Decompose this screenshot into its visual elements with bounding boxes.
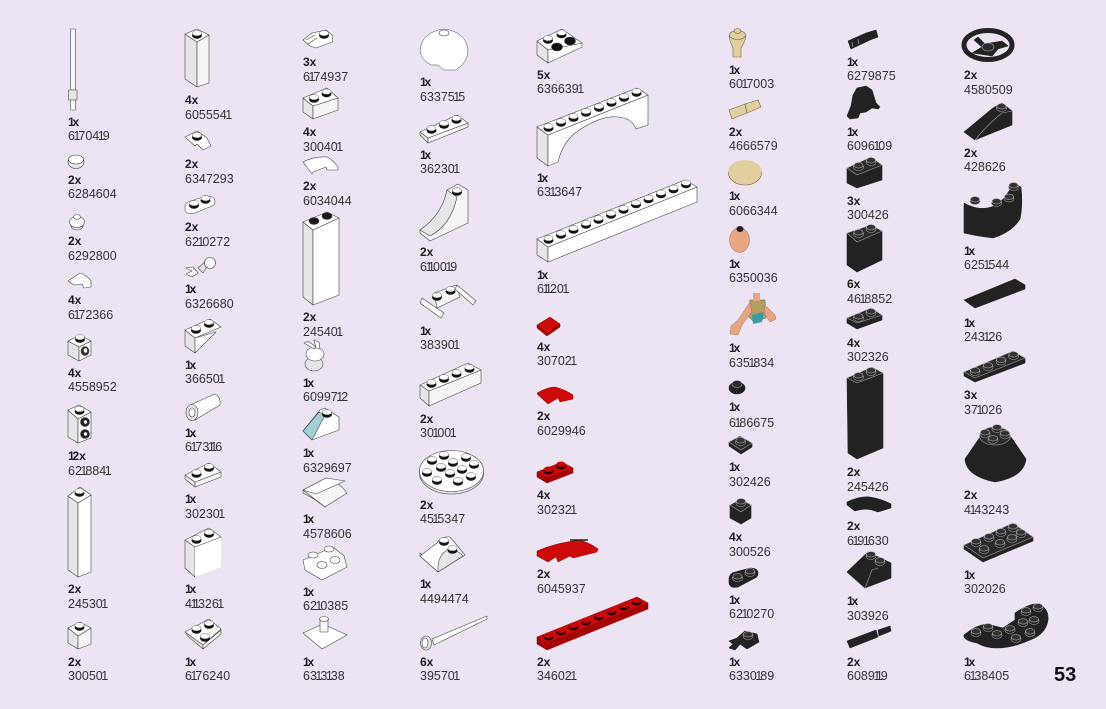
label: 6347293 — [185, 157, 234, 186]
icon: slope with black studs — [537, 29, 582, 63]
label: 300501: 300501 — [68, 669, 108, 683]
icon: black curved tile — [847, 497, 891, 512]
label: 300526: 4x — [729, 530, 743, 544]
label: 6284604 — [68, 173, 117, 201]
label: 243126 — [964, 316, 1002, 344]
icon: brick with side stud — [68, 334, 91, 361]
label: 6174937: 6174937 — [303, 70, 348, 84]
icon: 1x1 brick — [68, 622, 91, 649]
label: 6210385: 1x — [303, 585, 314, 599]
label: 6351834 — [729, 341, 774, 370]
label: 6284604: 6284604 — [68, 187, 117, 201]
label: 6089119 — [847, 655, 888, 683]
label: 6284604: 2x — [68, 173, 82, 187]
label: 4113261: 1x — [185, 582, 196, 596]
label: 302301: 302301 — [185, 507, 225, 521]
icon: red tile — [537, 317, 560, 336]
label: 6347293: 2x — [185, 157, 199, 171]
label: 4143243: 2x — [964, 488, 978, 502]
icon: tan cone — [729, 28, 746, 57]
label: 6366391 — [537, 68, 584, 96]
label: 6218841 — [68, 449, 112, 478]
icon: small clip parts — [186, 258, 216, 277]
icon: black handle — [848, 30, 878, 49]
icon: long antenna — [420, 616, 487, 650]
icon: oval plate — [185, 196, 215, 214]
label: 300501 — [68, 655, 108, 683]
label: 300526: 300526 — [729, 545, 771, 559]
label: 6096109 — [847, 125, 892, 153]
label: 6366391: 6366391 — [537, 82, 584, 96]
icon: tan round tile — [728, 160, 762, 185]
label: 300426: 300426 — [847, 208, 889, 222]
label: 6172366 — [68, 293, 113, 322]
label: 300401: 4x — [303, 125, 317, 139]
label: 300501: 2x — [68, 655, 82, 669]
label: 346021 — [537, 655, 577, 683]
label: 6096109: 1x — [847, 125, 858, 139]
label: 346021: 2x — [537, 655, 551, 669]
label: 307021 — [537, 340, 577, 368]
label: 6210270 — [729, 593, 774, 621]
label: 395701 — [420, 655, 460, 683]
label: 302321: 4x — [537, 488, 551, 502]
label: 4494474: 4494474 — [420, 592, 469, 606]
label: 245301: 245301 — [68, 597, 108, 611]
label: 6210272 — [185, 220, 230, 249]
label: 6045937: 2x — [537, 567, 551, 581]
icon: slope with transparent blue — [303, 408, 339, 440]
icon: black plate with clip — [729, 631, 759, 650]
label: 4558952: 4558952 — [68, 380, 117, 394]
label: 6326680 — [185, 282, 234, 311]
label: 6210270: 6210270 — [729, 607, 774, 621]
label: 4494474 — [420, 577, 469, 606]
label: 6313647 — [537, 171, 582, 199]
label: 302426: 1x — [729, 460, 740, 474]
label: 6351834: 1x — [729, 341, 740, 355]
icon: black half-round brick — [964, 182, 1022, 238]
icon: black 2x4 plate — [964, 523, 1033, 562]
label: 300526 — [729, 530, 771, 559]
label: 6176240 — [185, 655, 230, 683]
label: 6017003: 1x — [729, 63, 740, 77]
icon: curved quarter tile — [68, 273, 91, 288]
label: 6279875 — [847, 55, 896, 83]
label: 4578606 — [303, 512, 352, 541]
label: 6172366: 4x — [68, 293, 82, 307]
label: 6066344: 6066344 — [729, 204, 778, 218]
icon: red curved tile — [537, 387, 573, 404]
label: 383901: 383901 — [420, 338, 460, 352]
label: 6186675: 6186675 — [729, 416, 774, 430]
label: 6279875: 1x — [847, 55, 858, 69]
icon: red 1x2 plate — [537, 462, 573, 483]
label: 302326: 4x — [847, 336, 861, 350]
label: 245301 — [68, 582, 108, 611]
icon: black cone — [965, 424, 1026, 482]
icon: 1x4 brick — [420, 363, 481, 406]
label: 6350036 — [729, 257, 778, 285]
label: 6017003: 6017003 — [729, 77, 774, 91]
label: 6099712: 1x — [303, 376, 314, 390]
label: 4515347 — [420, 498, 465, 526]
icon: black 1x1 brick — [730, 498, 751, 524]
page number: 53 — [1054, 664, 1076, 686]
icon: minidoll torso — [730, 293, 776, 335]
label: 6138405: 1x — [964, 655, 975, 669]
label: 6045937: 6045937 — [537, 582, 586, 596]
label: 6313138: 6313138 — [303, 669, 345, 683]
label: 6173116: 1x — [185, 426, 196, 440]
label: 611201: 611201 — [537, 282, 569, 296]
label: 346021: 346021 — [537, 669, 577, 683]
label: 6337515: 6337515 — [420, 90, 465, 104]
label: 6029946: 2x — [537, 409, 551, 423]
label: 6313138: 1x — [303, 655, 314, 669]
label: 371026 — [964, 388, 1002, 417]
icon: round plate — [420, 450, 484, 494]
label: 6034044: 6034044 — [303, 194, 352, 208]
label: 6313647: 6313647 — [537, 185, 582, 199]
icon: tall 1x1 brick — [185, 29, 209, 87]
icon: 1x12 brick — [537, 180, 697, 262]
label: 245401: 2x — [303, 310, 317, 324]
label: 301001: 2x — [420, 412, 434, 426]
label: 302026: 302026 — [964, 582, 1006, 596]
label: 6292800: 2x — [68, 234, 82, 248]
label: 6110019: 2x — [420, 245, 434, 259]
icon: antenna — [68, 29, 77, 110]
icon: curved slope — [303, 478, 347, 507]
label: 6176240: 6176240 — [185, 669, 230, 683]
label: 6138405: 6138405 — [964, 669, 1009, 683]
label: 302426: 302426 — [729, 475, 771, 489]
icon: brick with two side studs — [68, 405, 91, 443]
icon: black long tile — [964, 279, 1025, 308]
label: 4618852: 6x — [847, 277, 861, 291]
label: 6055541: 4x — [185, 93, 199, 107]
icon: black tall brick — [847, 367, 883, 459]
label: 245401 — [303, 310, 343, 339]
icon: red curved plate — [537, 540, 598, 562]
label: 6191630: 6191630 — [847, 534, 889, 548]
label: 6337515 — [420, 75, 465, 104]
label: 4143243 — [964, 488, 1009, 517]
label: 4558952: 4x — [68, 366, 82, 380]
label: 6326680: 1x — [185, 282, 196, 296]
label: 6191630: 2x — [847, 519, 861, 533]
label: 6034044: 2x — [303, 179, 317, 193]
icon: round tile — [68, 155, 84, 168]
label: 307021: 307021 — [537, 354, 577, 368]
label: 6329697: 1x — [303, 446, 314, 460]
label: 6292800: 6292800 — [68, 249, 117, 263]
label: 6218841: 6218841 — [68, 464, 112, 478]
icon: white dome — [420, 29, 468, 70]
label: 395701: 6x — [420, 655, 434, 669]
label: 300426: 3x — [847, 194, 861, 208]
label: 6055541 — [185, 93, 232, 122]
label: 300401: 300401 — [303, 140, 343, 154]
label: 6066344: 1x — [729, 189, 740, 203]
label: 4113261 — [185, 582, 224, 611]
label: 4666579 — [729, 125, 778, 153]
label: 302301 — [185, 492, 225, 521]
label: 303926 — [847, 594, 889, 623]
icon: plate with bars — [420, 285, 476, 318]
label: 6186675 — [729, 400, 774, 430]
icon: round ball part — [70, 214, 84, 230]
label: 6351834: 6351834 — [729, 356, 774, 370]
label: 302026: 1x — [964, 568, 975, 582]
icon: black half-round plate — [964, 604, 1048, 648]
label: 6350036: 6350036 — [729, 271, 778, 285]
label: 362301: 1x — [420, 148, 431, 162]
icon: plate with clip — [185, 131, 211, 150]
label: 300401 — [303, 125, 343, 154]
label: 6292800 — [68, 234, 117, 263]
icon: jumper plate — [303, 616, 347, 649]
icon: black slope — [847, 552, 891, 588]
icon: black lightsaber hilt — [847, 626, 891, 648]
icon: 1x3 plate — [420, 115, 468, 143]
label: 366501: 366501 — [185, 372, 225, 386]
label: 6191630 — [847, 519, 889, 548]
label: 6110019 — [420, 245, 457, 274]
label: 362301 — [420, 148, 460, 176]
label: 6313138 — [303, 655, 345, 683]
label: 302301: 1x — [185, 492, 196, 506]
label: 4666579: 4666579 — [729, 139, 778, 153]
label: 4494474: 1x — [420, 577, 431, 591]
label: 366501 — [185, 358, 225, 386]
label: 6279875: 6279875 — [847, 69, 896, 83]
label: 245426: 245426 — [847, 480, 889, 494]
icon: cylinder pin — [186, 394, 220, 420]
label: 6170419: 6170419 — [68, 129, 110, 143]
label: 6251544: 6251544 — [964, 258, 1009, 272]
icon: tall brick — [68, 487, 91, 577]
label: 6138405 — [964, 655, 1009, 683]
label: 6366391: 5x — [537, 68, 551, 82]
icon: inverted slope — [185, 319, 221, 353]
icon: inverted double plate — [303, 546, 347, 580]
icon: black steering wheel — [964, 30, 1012, 60]
label: 6350036: 1x — [729, 257, 740, 271]
label: 6045937 — [537, 567, 586, 596]
icon: black curved slope — [964, 103, 1012, 140]
label: 6017003 — [729, 63, 774, 91]
label: 395701: 395701 — [420, 669, 460, 683]
label: 6172366: 6172366 — [68, 308, 113, 322]
icon: 1x2 plate — [185, 463, 221, 487]
label: 611201: 1x — [537, 268, 548, 282]
label: 6174937 — [303, 55, 348, 84]
label: 6251544: 1x — [964, 244, 975, 258]
label: 6099712: 6099712 — [303, 390, 348, 404]
label: 6110019: 6110019 — [420, 260, 457, 274]
icon: black 1x2 brick — [847, 157, 882, 188]
label: 4618852: 4618852 — [847, 292, 892, 306]
label: 245426 — [847, 465, 889, 494]
column 5 — [537, 29, 697, 683]
label: 6029946: 6029946 — [537, 424, 586, 438]
label: 428626: 2x — [964, 146, 978, 160]
label: 4143243: 4143243 — [964, 503, 1009, 517]
label: 371026: 3x — [964, 388, 978, 402]
column 7 — [847, 30, 896, 683]
label: 302026 — [964, 568, 1006, 596]
label: 6176240: 1x — [185, 655, 196, 669]
label: 6218841: 12x — [68, 449, 86, 463]
label: 6329697 — [303, 446, 352, 475]
column 1 — [68, 29, 117, 683]
label: 245401: 245401 — [303, 325, 343, 339]
icon: black 1x1 plate — [729, 436, 752, 454]
icon: plate with clips — [303, 30, 333, 48]
icon: black 1x4 plate — [964, 351, 1025, 382]
label: 383901: 1x — [420, 324, 431, 338]
label: 6326680: 6326680 — [185, 297, 234, 311]
label: 6251544 — [964, 244, 1009, 272]
label: 302426 — [729, 460, 771, 489]
icon: black oval plate — [729, 568, 758, 588]
column 3 — [303, 30, 352, 683]
label: 4515347: 4515347 — [420, 512, 465, 526]
label: 6210270: 1x — [729, 593, 740, 607]
label: 245301: 2x — [68, 582, 82, 596]
label: 6330189 — [729, 655, 774, 683]
label: 383901 — [420, 324, 460, 352]
label: 6210385 — [303, 585, 348, 613]
icon: long white arch — [537, 88, 648, 166]
label: 6330189: 6330189 — [729, 669, 774, 683]
label: 366501: 1x — [185, 358, 196, 372]
label: 302326 — [847, 336, 889, 364]
label: 362301: 362301 — [420, 162, 460, 176]
label: 4578606: 4578606 — [303, 527, 352, 541]
label: 6186675: 1x — [729, 400, 740, 414]
icon: 1x2 brick — [303, 88, 338, 119]
label: 6055541: 6055541 — [185, 108, 232, 122]
column 8 — [964, 30, 1048, 683]
label: 4578606: 1x — [303, 512, 314, 526]
label: 6173116: 6173116 — [185, 440, 222, 454]
label: 6347293: 6347293 — [185, 172, 234, 186]
label: 428626: 428626 — [964, 160, 1006, 174]
label: 4113261: 4113261 — [185, 597, 224, 611]
icon: black round part — [729, 380, 745, 394]
label: 6099712 — [303, 376, 348, 404]
label: 4558952 — [68, 366, 117, 394]
label: 6329697: 6329697 — [303, 461, 352, 475]
label: 611201 — [537, 268, 569, 296]
label: 302321 — [537, 488, 577, 517]
label: 4580509: 4580509 — [964, 83, 1013, 97]
label: 6173116 — [185, 426, 222, 454]
column 4 — [420, 29, 487, 683]
label: 4618852 — [847, 277, 892, 306]
icon: arch slope — [420, 184, 468, 241]
label: 302321: 302321 — [537, 503, 577, 517]
label: 6170419 — [68, 115, 110, 143]
icon: 1x2 tall brick — [185, 528, 221, 577]
label: 303926: 1x — [847, 594, 858, 608]
label: 6210385: 6210385 — [303, 599, 348, 613]
label: 6210272: 2x — [185, 220, 199, 234]
icon: minifigure head — [730, 226, 750, 252]
label: 6337515: 1x — [420, 75, 431, 89]
label: 303926: 303926 — [847, 609, 889, 623]
label: 6066344 — [729, 189, 778, 218]
label: 301001: 301001 — [420, 426, 457, 440]
label: 4515347: 2x — [420, 498, 434, 512]
label: 6170419: 1x — [68, 115, 79, 129]
label: 6174937: 3x — [303, 55, 317, 69]
icon: curved brick — [420, 537, 465, 572]
label: 428626 — [964, 146, 1006, 174]
icon: black hair — [847, 86, 880, 119]
label: 6034044 — [303, 179, 352, 208]
label: 6330189: 1x — [729, 655, 740, 669]
icon: white bunny — [304, 340, 324, 371]
label: 6096109: 6096109 — [847, 139, 892, 153]
label: 371026: 371026 — [964, 403, 1002, 417]
icon: tall 1x2 brick — [303, 212, 339, 305]
icon: tan pin — [729, 100, 761, 119]
label: 300426 — [847, 194, 889, 222]
label: 302326: 302326 — [847, 350, 889, 364]
label: 6089119: 6089119 — [847, 669, 888, 683]
label: 6089119: 2x — [847, 655, 861, 669]
label: 307021: 4x — [537, 340, 551, 354]
icon: red 1x8 plate — [537, 597, 648, 650]
label: 4580509: 2x — [964, 68, 978, 82]
label: 245426: 2x — [847, 465, 861, 479]
label: 301001 — [420, 412, 457, 440]
icon: wedge plate three studs — [185, 619, 221, 649]
label: 243126: 243126 — [964, 330, 1002, 344]
label: 6029946 — [537, 409, 586, 438]
label: 4666579: 2x — [729, 125, 743, 139]
label: 6313647: 1x — [537, 171, 548, 185]
label: 4580509 — [964, 68, 1013, 97]
icon: curved tile — [303, 157, 338, 174]
column 2 — [185, 29, 234, 683]
label: 6210272: 6210272 — [185, 235, 230, 249]
column 6 — [728, 28, 778, 683]
icon: black tall 1x2 brick — [847, 224, 882, 272]
icon: black 1x2 plate — [847, 308, 882, 329]
label: 243126: 1x — [964, 316, 975, 330]
